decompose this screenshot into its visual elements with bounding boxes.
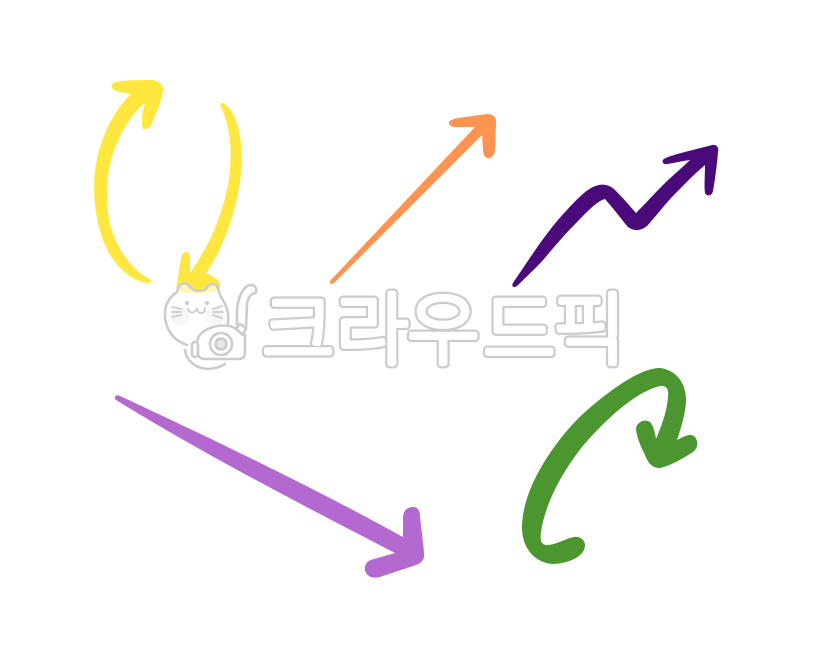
watermark: brand name outline: 크라우드픽: [262, 286, 626, 375]
watermark: cat cheeks: [170, 306, 224, 326]
watermark: cat face: [172, 302, 223, 318]
watermark: brand name outline: 크라우드픽: [262, 286, 626, 375]
watermark: cat head: [165, 283, 228, 345]
arrow: dark purple zigzag: [512, 145, 718, 287]
arrow: orange straight diagonal: [330, 114, 496, 284]
arrow: violet long diagonal: [115, 395, 424, 578]
arrow: green curved hook: [522, 368, 697, 564]
watermark: cat tail: [185, 285, 256, 369]
arrow: yellow cycle, right arc pointing down: [176, 103, 242, 293]
watermark: camera: [192, 324, 246, 359]
arrow: yellow cycle, left arc pointing up: [94, 80, 163, 283]
watermark logo: [165, 283, 626, 375]
